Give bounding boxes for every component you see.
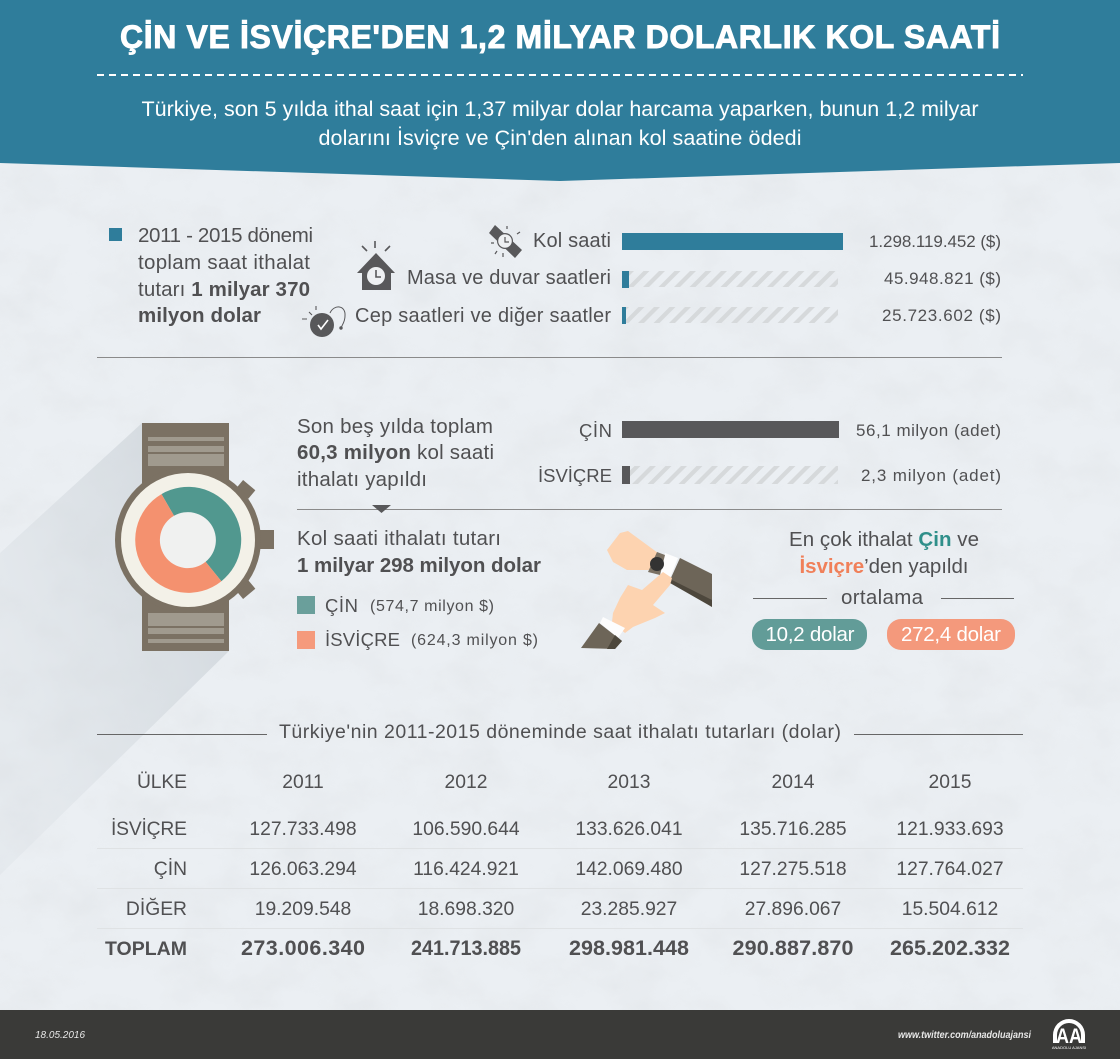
- row: Toplam: 241.713.885: [411, 936, 521, 960]
- text: value total and legend: 1 milyar 298 milyon dolar: [297, 554, 541, 577]
- text: total units: ithalatı yapıldı: [297, 468, 427, 491]
- logo: AA: AA: [1056, 1025, 1082, 1048]
- summary note: tutarı 1 milyar 370: [138, 278, 310, 301]
- subtitle: [142, 97, 978, 150]
- text: total units: Son beş yılda toplam: [297, 415, 493, 438]
- bar chart: import value by type: Masa ve duvar saatleri: [407, 267, 611, 289]
- header band: [0, 0, 1120, 181]
- summary note: milyon dolar: [138, 304, 261, 327]
- logo: AA: ANADOLU AJANSI: [1052, 1045, 1086, 1050]
- icon: house clock: [357, 241, 395, 290]
- callout: average prices: En çok ithalat Çin ve: [789, 528, 979, 551]
- callout: average prices: İsviçre’den yapıldı: [800, 555, 968, 578]
- row: İsviçre: İSVİÇRE: [111, 817, 187, 840]
- bar chart: units by country: [538, 420, 1001, 486]
- row: Çin: 116.424.921: [413, 859, 519, 880]
- row: Toplam: 265.202.332: [890, 936, 1010, 960]
- bar chart: import value by type: 25.723.602 ($): [882, 306, 1001, 325]
- row: Diğer: 18.698.320: [418, 899, 514, 920]
- row: Diğer: 15.504.612: [902, 899, 998, 920]
- logo: AA: [1052, 1019, 1086, 1050]
- row: Toplam: 273.006.340: [241, 936, 365, 960]
- icon: wrist watch donut chart: [115, 423, 274, 651]
- callout: average prices: ortalama: [841, 586, 924, 609]
- text: value total and legend: Kol saati ithalatı tutarı: [297, 527, 501, 550]
- donut: Çin: [162, 487, 241, 581]
- table header row: 2012: [445, 772, 487, 793]
- bar chart: units by country: 56,1 milyon (adet): [856, 421, 1001, 440]
- footer bar: [0, 1010, 1120, 1059]
- table header row: 2015: [929, 772, 971, 793]
- title: ÇİN VE İSVİÇRE'DEN 1,2 MİLYAR DOLARLIK KOL SAATİ: [120, 19, 1000, 55]
- bar chart: units by country: İSVİÇRE: [538, 465, 612, 486]
- subtitle: Türkiye, son 5 yılda ithal saat için 1,37 milyar dolar harcama yaparken, bunun 1,2 milyar: [142, 97, 978, 121]
- row: İsviçre: 121.933.693: [896, 819, 1004, 840]
- row: Çin: [154, 857, 1004, 880]
- row: Diğer: 19.209.548: [255, 899, 351, 920]
- row: Toplam: TOPLAM: [105, 938, 187, 960]
- text: total units: [297, 415, 494, 491]
- row: Diğer: 23.285.927: [581, 899, 677, 920]
- legend: Çin: (574,7 milyon $): [370, 598, 494, 615]
- row: İsviçre: [111, 817, 1004, 840]
- bar chart: import value by type: [355, 230, 1001, 327]
- row: Çin: 127.764.027: [896, 859, 1004, 880]
- row: İsviçre: 106.590.644: [412, 819, 520, 840]
- row: Toplam: 298.981.448: [569, 936, 689, 960]
- table header row: ÜLKE: [137, 771, 187, 793]
- bar chart: import value by type: 45.948.821 ($): [884, 269, 1001, 288]
- watch long shadow: [0, 423, 229, 875]
- row: Diğer: DİĞER: [126, 897, 187, 920]
- pill: Çin average: 10,2 dolar: [766, 623, 855, 646]
- bar chart: import value by type: Cep saatleri ve diğer saatler: [355, 305, 611, 327]
- row: İsviçre: 135.716.285: [739, 819, 847, 840]
- row: Diğer: [126, 897, 998, 920]
- summary note: [109, 224, 313, 327]
- table header row: 2014: [772, 772, 815, 793]
- row: Toplam: 290.887.870: [732, 936, 854, 960]
- bar chart: units by country: ÇİN: [579, 420, 612, 441]
- callout: average prices: [752, 528, 1015, 650]
- summary note: 2011 - 2015 dönemi: [138, 224, 313, 247]
- row: Çin: 142.069.480: [575, 859, 683, 880]
- data table: [97, 771, 1023, 960]
- summary note: toplam saat ithalat: [138, 251, 310, 274]
- donut: İsviçre: [135, 494, 221, 593]
- pill: İsviçre average: [887, 619, 1015, 650]
- legend: İsviçre: (624,3 milyon $): [411, 632, 538, 649]
- row: Çin: ÇİN: [154, 857, 187, 880]
- pill: İsviçre average: 272,4 dolar: [901, 623, 1001, 646]
- row: Çin: 127.275.518: [739, 859, 847, 880]
- bar chart: import value by type: Kol saati: [533, 230, 611, 252]
- pill: Çin average: [752, 619, 867, 650]
- arrow: divider pointer: [372, 505, 391, 513]
- icon: wrist watch: [489, 225, 522, 258]
- bar chart: import value by type: 1.298.119.452 ($): [869, 232, 1001, 251]
- text: total units: 60,3 milyon kol saati: [297, 441, 494, 464]
- row: Toplam: [105, 936, 1010, 960]
- legend: Çin: [297, 595, 494, 616]
- text: value total and legend: [297, 527, 541, 650]
- table header row: 2013: [608, 772, 650, 793]
- source url: www.twitter.com/anadoluajansi: [898, 1030, 1031, 1041]
- row: İsviçre: 127.733.498: [249, 819, 357, 840]
- table header row: [137, 771, 971, 793]
- icon: hands and watch: [581, 531, 712, 649]
- date: 18.05.2016: [35, 1030, 85, 1041]
- legend: Çin: ÇİN: [325, 595, 358, 616]
- subtitle: dolarını İsviçre ve Çin'den alınan kol saatine ödedi: [318, 126, 802, 150]
- table heading: Türkiye'nin 2011-2015 döneminde saat ithalatı tutarları (dolar): [279, 721, 841, 743]
- icon: pocket watch: [302, 306, 345, 337]
- legend: İsviçre: İSVİÇRE: [325, 629, 400, 650]
- legend: İsviçre: [297, 629, 538, 650]
- table header row: 2011: [282, 772, 324, 793]
- row: Diğer: 27.896.067: [745, 899, 841, 920]
- row: Çin: 126.063.294: [249, 859, 357, 880]
- bar chart: units by country: 2,3 milyon (adet): [861, 466, 1001, 485]
- row: İsviçre: 133.626.041: [575, 819, 683, 840]
